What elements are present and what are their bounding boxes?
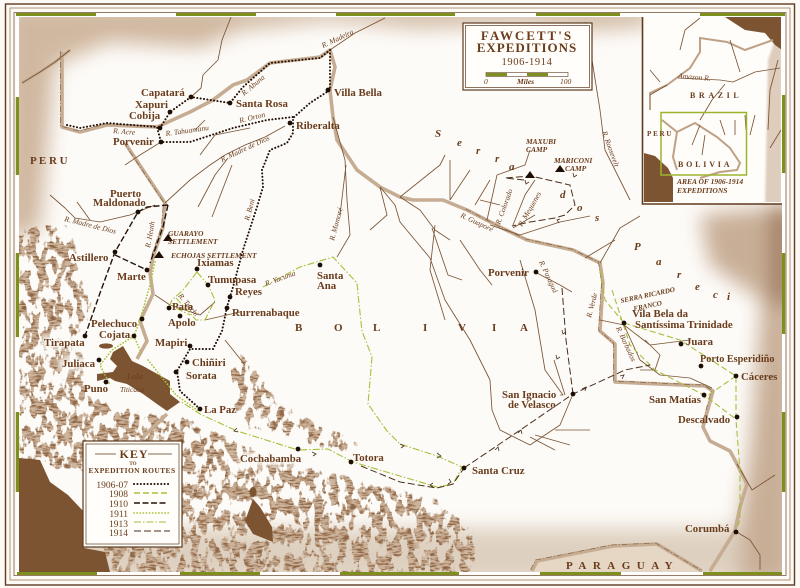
town labels: La Paz	[204, 404, 236, 416]
title box: 0	[484, 77, 488, 86]
town labels: Apolo	[168, 317, 196, 329]
river labels: R. Mamoré	[327, 206, 345, 242]
mountain ranges	[18, 225, 475, 578]
country labels	[30, 155, 679, 572]
town labels: Porvenir	[113, 136, 154, 148]
river labels: R. Acre	[112, 126, 136, 137]
town labels: Rurrenabaque	[232, 307, 300, 319]
inset: Pacific	[644, 153, 673, 202]
key box: EXPEDITION ROUTES	[88, 466, 176, 475]
town labels: Xapuri	[135, 99, 168, 111]
settlement labels: CAMP	[526, 145, 548, 154]
country labels: I	[423, 322, 427, 334]
route 1910	[85, 205, 168, 336]
town labels: Mapiri	[155, 337, 187, 349]
mountain range lettering: Serra dos Parecis: o	[577, 202, 583, 214]
route arrows	[234, 173, 624, 487]
mountain range lettering: Serra dos Parecis: s	[594, 212, 599, 224]
key box: 1914	[109, 529, 128, 539]
title box: Miles	[516, 77, 534, 86]
key box	[83, 441, 182, 547]
key box: 1906-07	[96, 481, 128, 491]
inset locator map: BOLIVIA	[678, 160, 732, 169]
mountain range lettering: Serra dos Parecis: r	[677, 269, 682, 281]
key box: 1911	[109, 510, 128, 520]
key box: TO	[129, 462, 137, 467]
river labels: R. Tuichi	[176, 291, 201, 318]
town labels: de Velasco	[508, 399, 556, 411]
clear ground behind labels in the ranges	[38, 332, 294, 470]
river labels: R. Roosevelt	[600, 129, 622, 169]
town labels: Juliaca	[62, 358, 96, 370]
river labels: Lake	[126, 371, 144, 381]
town labels: Marte	[117, 271, 146, 283]
country labels: B	[295, 322, 303, 334]
title box	[463, 23, 592, 90]
lakes	[97, 343, 273, 542]
town labels: Astillero	[69, 252, 108, 264]
mountain range lettering: Serra dos Parecis: r	[476, 145, 481, 157]
inset: shaded coast wash	[764, 42, 781, 202]
settlement labels: FRANCO	[633, 299, 663, 313]
inset locator map: PERU	[647, 130, 673, 138]
mountain range lettering: Serra dos Parecis: e	[457, 137, 462, 149]
town labels: Cobija	[129, 110, 161, 122]
river labels: R. Madeira	[319, 27, 355, 50]
town labels: Cochabamba	[240, 453, 302, 465]
inset locator map: BRAZIL	[690, 91, 742, 100]
country labels: I	[492, 322, 496, 334]
country labels: L	[373, 322, 380, 334]
mountain range lettering: Serra dos Parecis: r	[495, 153, 500, 165]
town labels: Maldonado	[93, 197, 146, 209]
route 1906-07	[67, 50, 330, 409]
routes	[67, 50, 740, 530]
river labels: R. Tahuamanu	[164, 123, 210, 138]
river labels: R. Colorado	[493, 188, 515, 227]
river labels: R. Madre de Dios	[218, 133, 271, 164]
river labels: R. Heath	[143, 220, 157, 249]
settlement labels: ECHOJAS SETTLEMENT	[170, 251, 257, 260]
title box: EXPEDITIONS	[477, 40, 577, 55]
town labels: Puerto	[110, 188, 141, 200]
river labels: R. Verde	[584, 291, 600, 319]
town labels: Cáceres	[741, 371, 777, 383]
river labels: R. Orton	[237, 110, 266, 125]
town labels: Riberalta	[296, 120, 340, 132]
inset locator map	[642, 17, 782, 205]
mountain range lettering: Serra dos Parecis: d	[560, 189, 566, 201]
mountain range lettering: Serra dos Parecis: c	[713, 289, 718, 301]
country labels: O	[334, 322, 343, 334]
town labels: Totora	[353, 452, 384, 464]
town labels: Santíssima Trinidade	[635, 319, 733, 331]
key box: 1908	[109, 490, 128, 500]
key box: 1910	[109, 500, 128, 510]
town labels: Cojata	[99, 329, 131, 341]
route 1908	[600, 270, 740, 530]
town labels: San Matías	[649, 394, 701, 406]
settlement labels: SERRA RICARDO	[620, 286, 676, 305]
mountain range lettering: Serra dos Parecis: P	[634, 241, 641, 253]
town labels: Capatará	[141, 87, 185, 99]
inset: northeast ocean	[725, 17, 782, 50]
town labels: Porto Esperidiño	[700, 354, 774, 365]
settlement labels: CAMP	[565, 164, 587, 173]
town labels: Vila Bela da	[632, 308, 689, 320]
town labels: Santa	[317, 270, 344, 282]
town labels: Sorata	[186, 370, 217, 382]
settlement labels: MARICONI	[553, 156, 593, 165]
settlement labels: MAXUBI	[525, 137, 557, 146]
town labels: Chiñiri	[192, 357, 226, 369]
town labels: Corumbá	[685, 523, 730, 535]
inset locator map: Amazon R.	[677, 71, 711, 83]
mountain range lettering: Serra dos Parecis: S	[435, 128, 441, 140]
town labels: Ixiamas	[197, 257, 234, 269]
town labels: Reyes	[235, 286, 262, 298]
route 1913	[170, 257, 462, 487]
town labels: San Ignacio	[502, 389, 556, 401]
river labels: Titicaca	[120, 385, 144, 394]
country labels: A	[520, 322, 528, 334]
key box: 1913	[109, 520, 128, 530]
river labels: R. Barbados	[614, 324, 638, 363]
settlement triangles	[154, 165, 565, 258]
river labels: R. Paraguá	[537, 258, 560, 294]
mountain range lettering: Serra dos Parecis: a	[656, 256, 662, 268]
mountain range lettering: Serra dos Parecis: e	[695, 281, 700, 293]
title box: 100	[560, 77, 572, 86]
country labels: V	[458, 322, 466, 334]
settlement labels: GUARAYO	[168, 229, 204, 238]
territory: Pacific dark area	[19, 458, 110, 572]
inset: rivers	[650, 18, 781, 155]
town labels: Santa Cruz	[472, 465, 525, 477]
river labels	[63, 27, 638, 394]
town labels: Tumupasa	[208, 274, 257, 286]
town labels	[44, 87, 777, 535]
town labels: Ana	[317, 280, 337, 292]
river labels: R. Madre de Dios	[63, 214, 117, 236]
country labels: PARAGUAY	[566, 560, 679, 572]
title box: FAWCETT'S	[481, 28, 573, 43]
mountain range lettering: Serra dos Parecis	[435, 128, 731, 303]
river labels: R. Beni	[242, 198, 257, 222]
country labels: P E R U	[30, 155, 68, 167]
mountain range lettering: Serra dos Parecis: a	[509, 161, 515, 173]
town markers	[83, 88, 739, 534]
inset: area rectangle	[661, 112, 746, 175]
key box: KEY	[119, 447, 149, 461]
inset locator map: EXPEDITIONS	[676, 186, 727, 195]
town labels: Puno	[84, 383, 108, 395]
town labels: Pelechuco	[91, 318, 137, 330]
route 1911	[100, 262, 200, 412]
mountain range lettering: Serra dos Parecis: i	[727, 291, 731, 303]
inset: Amazon and borders	[650, 38, 773, 178]
town labels: Porvenir	[488, 267, 529, 279]
river labels: R. Abuna	[239, 73, 267, 98]
town labels: Villa Bella	[334, 87, 382, 99]
inset locator map: AREA OF 1906-1914	[676, 177, 743, 186]
title box: 1906-1914	[502, 57, 553, 68]
town labels: Juara	[686, 336, 714, 348]
settlement labels: SETTLEMENT	[168, 237, 218, 246]
town labels: Descalvado	[678, 414, 730, 426]
territory: Paraguay	[532, 544, 702, 571]
river labels: R. Guaporé	[458, 210, 495, 234]
route 1914	[361, 176, 650, 488]
town labels: Tirapata	[44, 337, 85, 349]
town labels: Pata	[172, 301, 194, 313]
settlement labels	[168, 137, 676, 313]
river labels: R. Yacuma	[263, 268, 297, 288]
river labels: R. Mequenes	[515, 190, 543, 229]
town labels: Santa Rosa	[236, 98, 288, 110]
